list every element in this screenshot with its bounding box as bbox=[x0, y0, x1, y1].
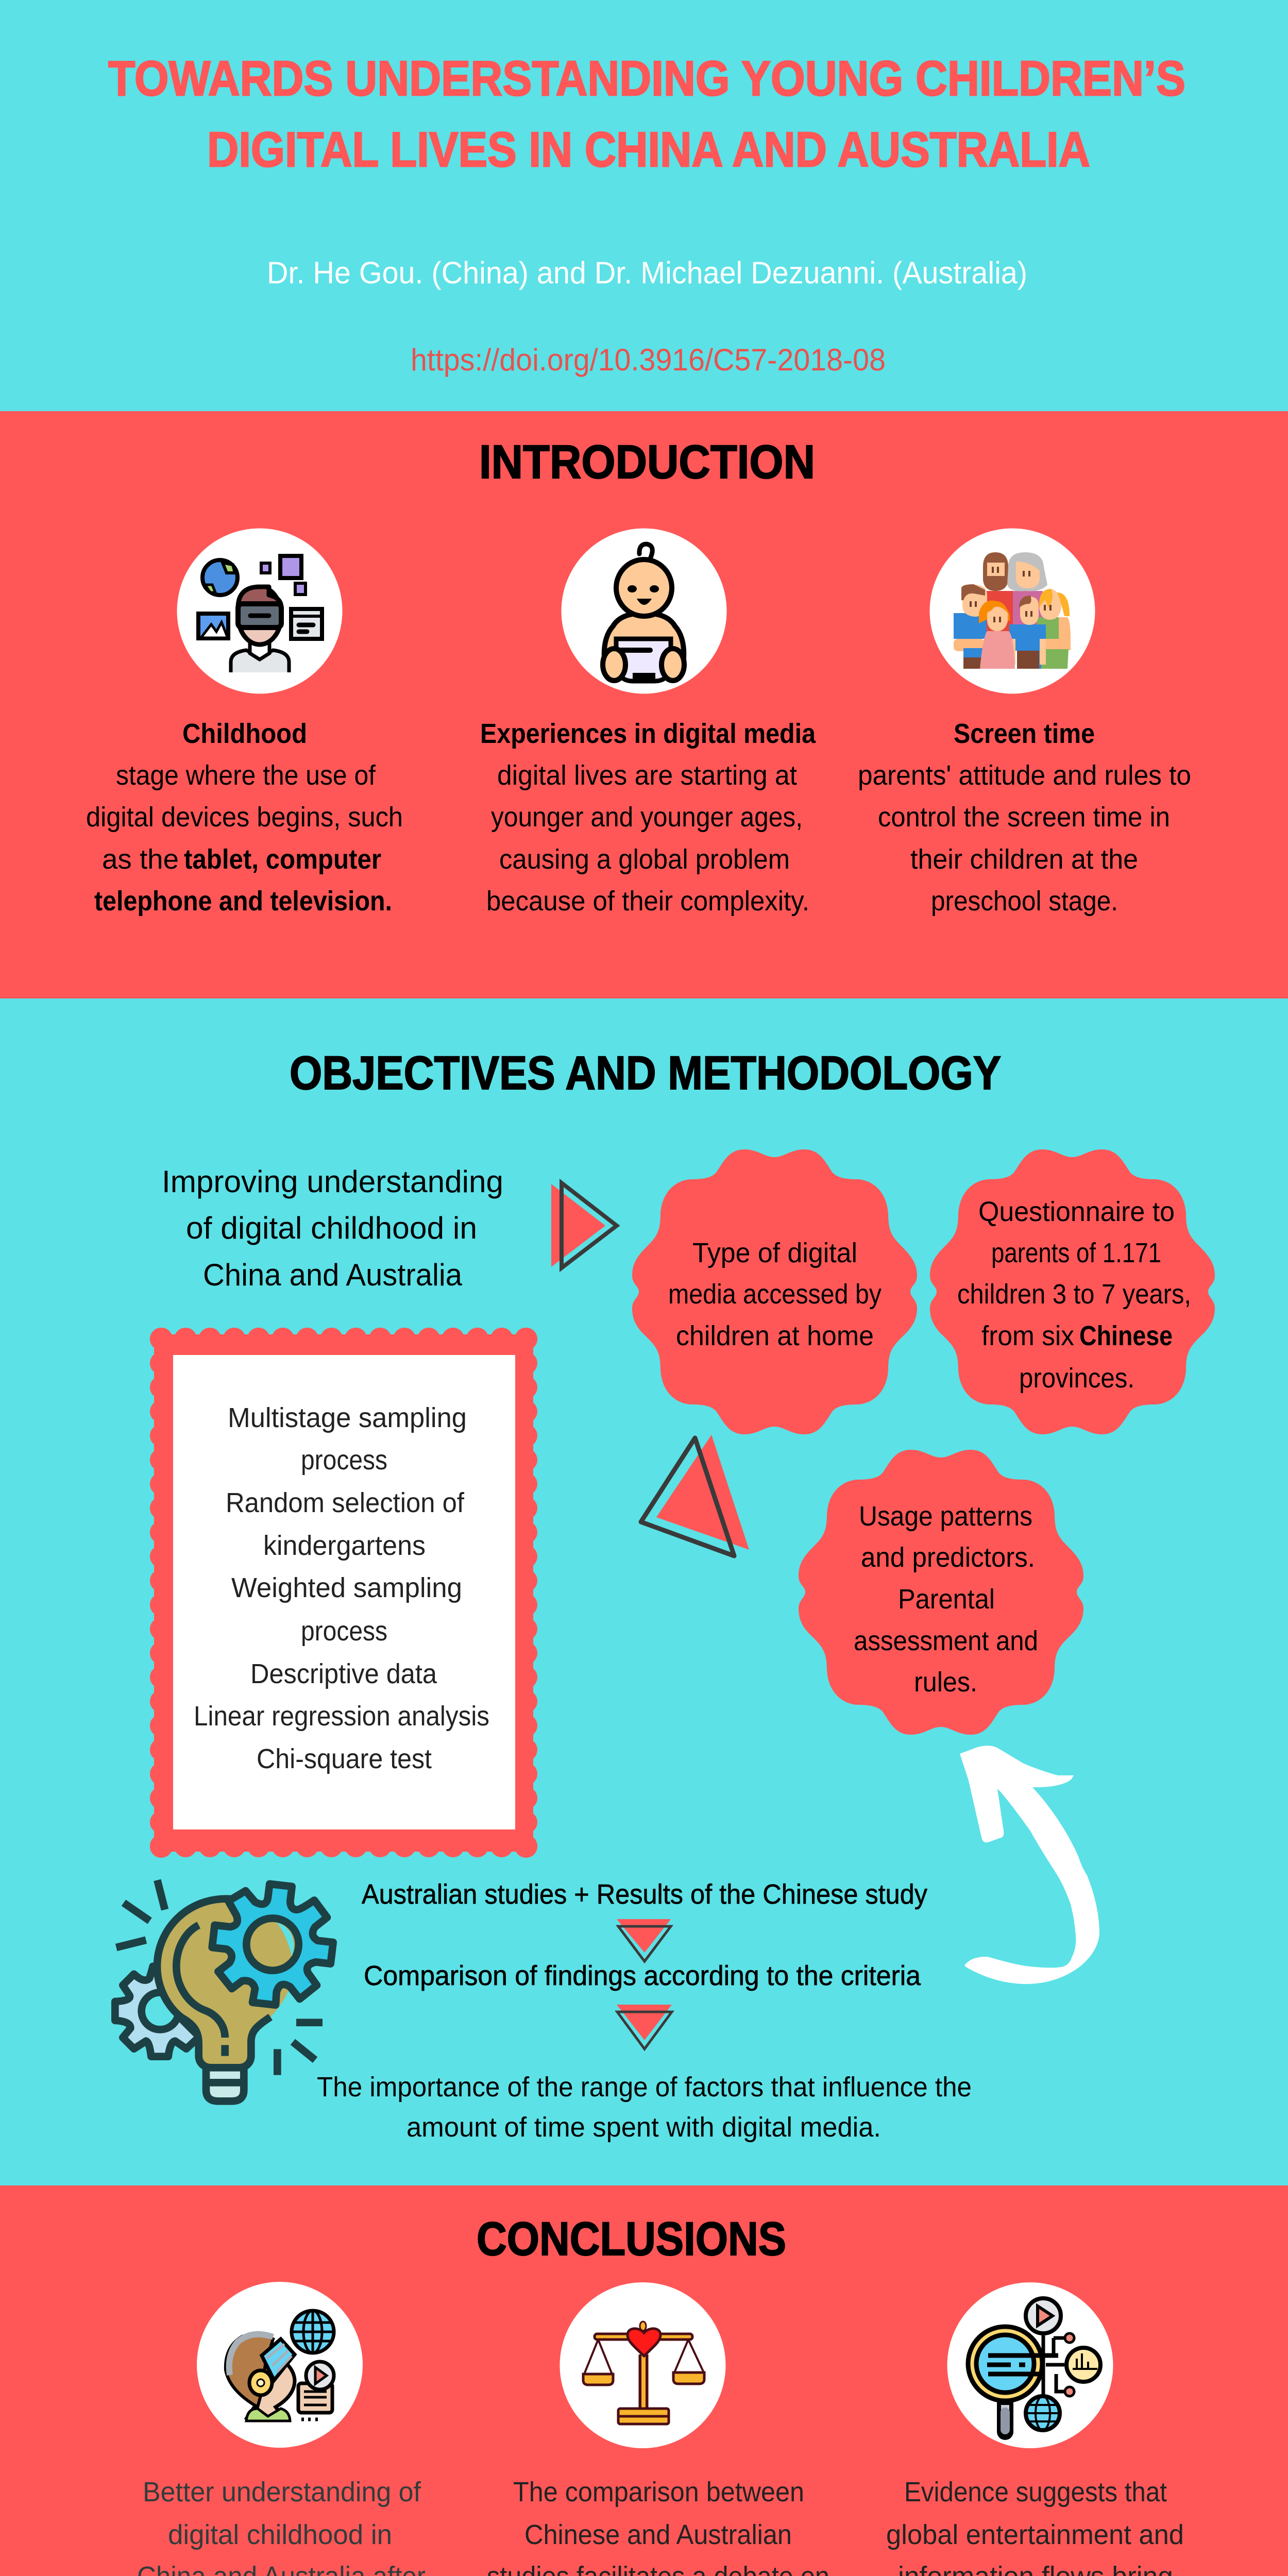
icon: child with VR headset and media bbox=[177, 529, 342, 693]
callout: questionnaire: provinces. bbox=[1019, 1363, 1134, 1394]
panel: methods list: kindergartens bbox=[263, 1530, 426, 1561]
text block: screen time: Screen time bbox=[954, 718, 1095, 749]
text block: childhood: digital devices begins, such bbox=[86, 802, 403, 833]
callout: usage patterns bbox=[799, 1450, 1083, 1735]
text block: screen time bbox=[858, 718, 1191, 917]
panel: title header bbox=[0, 0, 1288, 411]
icon: family bbox=[929, 529, 1095, 693]
text block: comparison flow: Australian studies + Results of the Chinese study bbox=[362, 1879, 927, 1910]
arrow: right triangle bbox=[551, 1183, 617, 1268]
text block: childhood bbox=[86, 718, 403, 917]
text block: objective bbox=[162, 1164, 503, 1292]
title bbox=[108, 51, 1185, 177]
authors: Dr. He Gou. (China) and Dr. Michael Dezuanni. (Australia) bbox=[267, 256, 1027, 290]
callout: usage patterns: Parental bbox=[898, 1584, 995, 1615]
callout: usage patterns: rules. bbox=[914, 1667, 977, 1698]
heading: introduction: INTRODUCTION bbox=[479, 436, 815, 488]
callout: usage patterns: Usage patterns bbox=[859, 1501, 1032, 1532]
panel: methods list: Descriptive data bbox=[250, 1658, 437, 1689]
text block: objective: of digital childhood in bbox=[186, 1211, 477, 1245]
callout: type of digital media: children at home bbox=[676, 1320, 874, 1351]
title: DIGITAL LIVES IN CHINA AND AUSTRALIA bbox=[207, 122, 1090, 177]
panel: methods list bbox=[154, 1334, 533, 1852]
text block: comparison debate: Chinese and Australian bbox=[524, 2519, 792, 2550]
panel: introduction bbox=[0, 411, 1288, 998]
text block: comparison debate bbox=[487, 2477, 829, 2576]
text block: comparison flow: amount of time spent with digital media. bbox=[406, 2112, 881, 2143]
text block: screen time: control the screen time in bbox=[878, 802, 1170, 833]
text block: childhood: Childhood bbox=[182, 718, 307, 749]
callout: questionnaire bbox=[930, 1149, 1215, 1434]
text block: objective: Improving understanding bbox=[162, 1164, 503, 1199]
title: TOWARDS UNDERSTANDING YOUNG CHILDREN’S bbox=[108, 51, 1185, 106]
text block: evidence bbox=[886, 2477, 1184, 2576]
icon: baby bbox=[562, 529, 726, 693]
text block: experiences in digital media: digital lives are starting at bbox=[497, 760, 797, 791]
icon: lightbulb with gears bbox=[115, 1880, 333, 2101]
text block: screen time: parents' attitude and rules to bbox=[858, 760, 1191, 791]
panel: methods list: Random selection of bbox=[226, 1487, 465, 1518]
panel: methods list: Multistage sampling bbox=[228, 1402, 467, 1433]
icon: balance scale with heart bbox=[560, 2282, 725, 2448]
text block: objective: China and Australia bbox=[203, 1258, 463, 1292]
panel: conclusions bbox=[0, 2185, 1288, 2576]
text block: childhood: as the bbox=[102, 844, 179, 875]
text block: comparison debate: The comparison between bbox=[513, 2477, 804, 2507]
text block: experiences in digital media: causing a global problem bbox=[499, 844, 790, 875]
panel: methods list: Chi-square test bbox=[257, 1743, 432, 1774]
text block: childhood: stage where the use of bbox=[116, 760, 376, 791]
arrow: down triangle one bbox=[617, 1919, 671, 1961]
text block: experiences in digital media bbox=[480, 718, 816, 917]
text block: better understanding: digital childhood in bbox=[168, 2519, 392, 2550]
text block: experiences in digital media: Experiences in digital media bbox=[480, 718, 816, 749]
panel: methods list: process bbox=[301, 1616, 387, 1647]
panel: objectives and methodology bbox=[0, 998, 1288, 2185]
text block: screen time: preschool stage. bbox=[931, 886, 1118, 917]
callout: type of digital media: media accessed by bbox=[668, 1279, 882, 1310]
callout: usage patterns: assessment and bbox=[854, 1625, 1038, 1656]
callout: type of digital media bbox=[632, 1149, 917, 1434]
icon: magnifier with network bbox=[947, 2282, 1113, 2448]
panel: methods list: Linear regression analysis bbox=[194, 1701, 489, 1732]
heading: conclusions: CONCLUSIONS bbox=[477, 2213, 786, 2265]
text block: evidence: Evidence suggests that bbox=[904, 2477, 1167, 2507]
text block: experiences in digital media: younger and younger ages, bbox=[491, 802, 803, 833]
text block: childhood: telephone and television. bbox=[94, 886, 392, 917]
callout: questionnaire: parents of 1.171 bbox=[991, 1238, 1161, 1268]
text block: comparison flow: The importance of the range of factors that influence the bbox=[317, 2072, 972, 2103]
text block: evidence: global entertainment and bbox=[886, 2519, 1184, 2550]
callout: questionnaire: from six bbox=[981, 1320, 1074, 1351]
panel: methods list: Weighted sampling bbox=[231, 1572, 462, 1603]
text block: screen time: their children at the bbox=[910, 844, 1138, 875]
callout: type of digital media: Type of digital bbox=[692, 1238, 857, 1268]
panel: methods list: process bbox=[301, 1445, 387, 1476]
icon: head with media bbox=[197, 2282, 363, 2448]
arrow: down-left triangle bbox=[641, 1435, 749, 1556]
text block: comparison flow: Comparison of findings according to the criteria bbox=[364, 1960, 921, 1991]
arrow: down triangle two bbox=[617, 2005, 672, 2049]
heading: objectives and methodology: OBJECTIVES AND METHODOLOGY bbox=[290, 1047, 1001, 1099]
callout: questionnaire: Chinese bbox=[1079, 1320, 1173, 1351]
text block: comparison flow bbox=[317, 1879, 972, 2143]
callout: questionnaire: Questionnaire to bbox=[978, 1196, 1175, 1227]
text block: childhood: tablet, computer bbox=[184, 844, 381, 875]
doi link: https://doi.org/10.3916/C57-2018-08 bbox=[411, 343, 886, 377]
callout: questionnaire: children 3 to 7 years, bbox=[957, 1279, 1191, 1310]
arrow: curved white arrow bbox=[960, 1745, 1099, 1984]
text block: better understanding bbox=[137, 2477, 426, 2576]
callout: usage patterns: and predictors. bbox=[861, 1542, 1035, 1573]
text block: better understanding: Better understanding of bbox=[143, 2477, 421, 2507]
text block: experiences in digital media: because of their complexity. bbox=[486, 886, 809, 917]
